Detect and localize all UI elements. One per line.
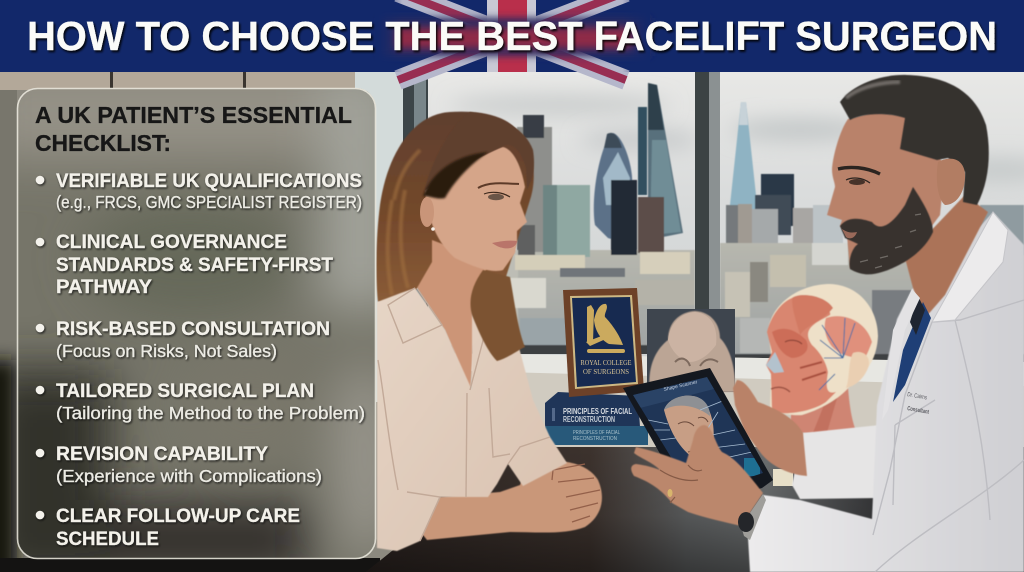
stacked books: PRINCIPLES OF FACIAL xyxy=(563,407,632,416)
checklist item: tailored surgical plan: (Tailoring the Method to the Problem) xyxy=(56,403,365,423)
surgeon's hair xyxy=(840,75,989,205)
panel frosted background xyxy=(18,88,376,559)
anatomy head model xyxy=(766,284,878,436)
checklist item: risk-based consultation: (Focus on Risks, Not Sales) xyxy=(56,341,277,361)
stacked books xyxy=(545,392,648,445)
checklist item: risk-based consultation xyxy=(36,318,330,361)
surgeon xyxy=(733,75,1024,572)
woman's fingers xyxy=(552,464,600,522)
plaque: Royal College of Surgeons xyxy=(563,288,644,397)
checklist item: tailored surgical plan xyxy=(36,380,365,423)
stacked books: RECONSTRUCTION xyxy=(563,415,615,424)
woman's eye, brow and lips xyxy=(478,183,519,248)
surgeon's upper sleeve xyxy=(792,425,880,499)
checklist item: qualifications: VERIFIABLE UK QUALIFICATIONS xyxy=(56,170,362,192)
surgeon's face xyxy=(827,112,945,268)
checklist item: tailored surgical plan: TAILORED SURGICAL PLAN xyxy=(56,380,314,402)
checklist item: revision capability: REVISION CAPABILITY xyxy=(56,443,268,465)
stacked books: PRINCIPLES OF FACIAL xyxy=(573,430,620,436)
surgeon's white coat xyxy=(748,212,1024,572)
surgeon's brow and eye xyxy=(838,167,880,185)
surgeon: Dr. Cairns xyxy=(907,392,927,401)
surgeon's ear xyxy=(937,159,965,205)
panel heading: A UK PATIENT’S ESSENTIAL xyxy=(35,102,352,128)
checklist item: revision capability xyxy=(36,443,322,486)
background: blurred office left side xyxy=(0,72,430,572)
woman's blouse details xyxy=(378,288,550,541)
window with London skyline xyxy=(403,72,1024,447)
woman's blouse xyxy=(377,288,567,551)
header banner xyxy=(0,0,1024,80)
checklist item: clinical governance: CLINICAL GOVERNANCE xyxy=(56,231,287,253)
checklist item: follow-up care: SCHEDULE xyxy=(56,528,159,550)
checklist item: qualifications: (e.g., FRCS, GMC SPECIALIST REGISTER) xyxy=(56,192,362,212)
clouds left pane xyxy=(450,95,700,150)
plaque: Royal College of Surgeons: ROYAL COLLEGE xyxy=(580,359,632,367)
panel heading: CHECKLIST: xyxy=(35,130,171,156)
surgeon's rear hand xyxy=(733,380,807,476)
surgeon's scrubs xyxy=(893,302,931,402)
checklist item: follow-up care: CLEAR FOLLOW-UP CARE xyxy=(56,505,300,527)
woman's hair shadow and sweep xyxy=(424,112,534,192)
surgeon: Consultant xyxy=(907,406,929,416)
tablet with face diagram: Shape Scanner xyxy=(663,379,698,393)
title: HOW TO CHOOSE THE BEST FACELIFT SURGEON xyxy=(27,13,997,59)
checklist item: risk-based consultation: RISK-BASED CONSULTATION xyxy=(56,318,330,340)
plaque: Royal College of Surgeons: OF SURGEONS xyxy=(583,368,629,376)
photograph of facial anatomy xyxy=(647,309,735,392)
checklist item: follow-up care xyxy=(36,505,300,550)
surgeon's neck xyxy=(905,195,988,318)
woman's front hair lock xyxy=(470,270,525,361)
woman's back hair xyxy=(376,112,534,302)
woman's hair highlights xyxy=(388,150,420,295)
skyline right pane xyxy=(720,102,1024,363)
icon: Union Jack flag xyxy=(375,0,650,80)
table xyxy=(366,447,900,572)
checklist item: clinical governance: STANDARDS & SAFETY-FIRST xyxy=(56,254,333,276)
panel border xyxy=(18,88,376,558)
woman's neck and chest xyxy=(417,240,490,392)
tablet with face diagram xyxy=(623,368,773,489)
panel heading xyxy=(35,102,352,156)
surgeon's coat folds xyxy=(873,300,1024,572)
surgeon's beard xyxy=(840,187,933,274)
woman's ear and earring xyxy=(420,197,434,227)
window mullion xyxy=(695,72,720,362)
skyline left pane xyxy=(428,83,695,360)
surgeon's lower hand with watch xyxy=(631,425,766,540)
wall and sill xyxy=(428,353,1024,447)
woman's face xyxy=(425,147,527,271)
checklist item: clinical governance: PATHWAY xyxy=(56,276,152,298)
stacked books: RECONSTRUCTION xyxy=(573,436,617,442)
panel: patient checklist xyxy=(16,88,376,560)
clouds right pane xyxy=(730,119,1024,182)
checklist item: qualifications xyxy=(36,170,362,212)
checklist item: revision capability: (Experience with Complications) xyxy=(56,466,322,486)
surgeon's collar xyxy=(932,212,1008,322)
icon: griffin crest xyxy=(586,304,625,353)
woman's far forearm and hands xyxy=(415,462,602,540)
woman patient xyxy=(376,112,602,551)
checklist item: clinical governance xyxy=(36,231,333,298)
